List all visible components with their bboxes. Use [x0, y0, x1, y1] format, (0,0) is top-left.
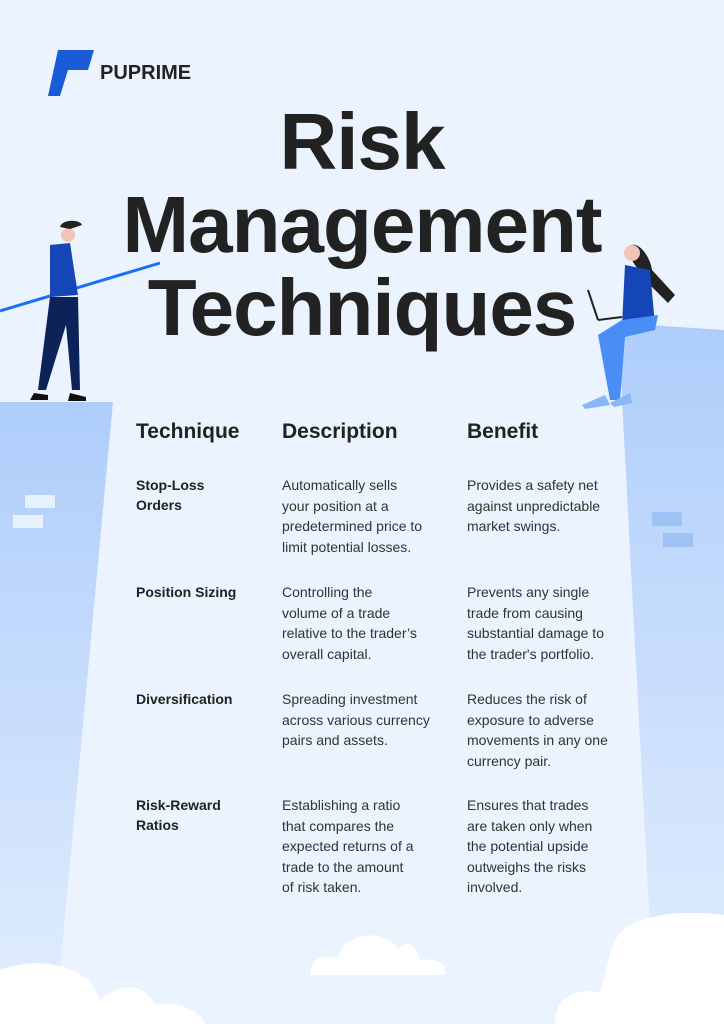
logo — [48, 50, 191, 96]
title: Techniques — [148, 263, 576, 352]
row: diversification: movements in any one — [467, 732, 608, 748]
row: position sizing — [136, 584, 604, 662]
table: Description — [282, 420, 398, 443]
row: diversification: currency pair. — [467, 752, 551, 768]
title: Management — [122, 180, 601, 269]
title: Risk — [280, 97, 444, 186]
row: risk-reward: Risk-Reward — [136, 797, 221, 813]
row: risk-reward: involved. — [467, 879, 522, 895]
row: risk-reward: the potential upside — [467, 838, 588, 854]
illustration: woman with laptop — [582, 244, 675, 409]
row: risk-reward: expected returns of a — [282, 838, 414, 854]
row: risk-reward: Ratios — [136, 817, 179, 833]
row: diversification: Diversification — [136, 691, 232, 707]
illustration: man with pole — [0, 220, 160, 401]
row: risk-reward: Ensures that trades — [467, 797, 588, 813]
row: stop-loss: Stop-Loss — [136, 477, 204, 493]
logo: PUPRIME — [100, 62, 191, 84]
table: Benefit — [467, 420, 538, 443]
row: diversification: across various currency — [282, 712, 430, 728]
row: position sizing: trade from causing — [467, 604, 583, 620]
row: risk-reward: trade to the amount — [282, 858, 403, 874]
table: Technique — [136, 420, 239, 443]
row: diversification: pairs and assets. — [282, 732, 388, 748]
row: position sizing: Controlling the — [282, 584, 372, 600]
row: stop-loss: Provides a safety net — [467, 477, 598, 493]
row: stop-loss: against unpredictable — [467, 498, 600, 514]
row: risk-reward: that compares the — [282, 818, 394, 834]
row: stop-loss: market swings. — [467, 518, 560, 534]
title — [122, 97, 602, 352]
row: risk-reward: outweighs the risks — [467, 858, 586, 874]
row: stop-loss: predetermined price to — [282, 518, 422, 534]
row: stop-loss — [136, 477, 600, 555]
row: position sizing: substantial damage to — [467, 625, 604, 641]
row: risk-reward: of risk taken. — [282, 879, 361, 895]
row: position sizing: overall capital. — [282, 646, 372, 662]
row: position sizing: the trader's portfolio. — [467, 646, 594, 662]
column headers — [136, 420, 538, 443]
table — [136, 420, 608, 895]
row: risk-reward — [136, 797, 592, 895]
row: stop-loss: your position at a — [282, 498, 389, 514]
row: stop-loss: Orders — [136, 497, 182, 513]
row: risk-reward: are taken only when — [467, 818, 592, 834]
row: position sizing: relative to the trader’s — [282, 625, 417, 641]
row: risk-reward: Establishing a ratio — [282, 797, 400, 813]
row: stop-loss: Automatically sells — [282, 477, 397, 493]
row: diversification: Spreading investment — [282, 691, 417, 707]
row: diversification — [136, 691, 608, 769]
row: diversification: exposure to adverse — [467, 712, 594, 728]
row: position sizing: Position Sizing — [136, 584, 236, 600]
row: diversification: Reduces the risk of — [467, 691, 587, 707]
row: position sizing: volume of a trade — [282, 604, 390, 620]
row: position sizing: Prevents any single — [467, 584, 589, 600]
row: stop-loss: limit potential losses. — [282, 538, 411, 554]
